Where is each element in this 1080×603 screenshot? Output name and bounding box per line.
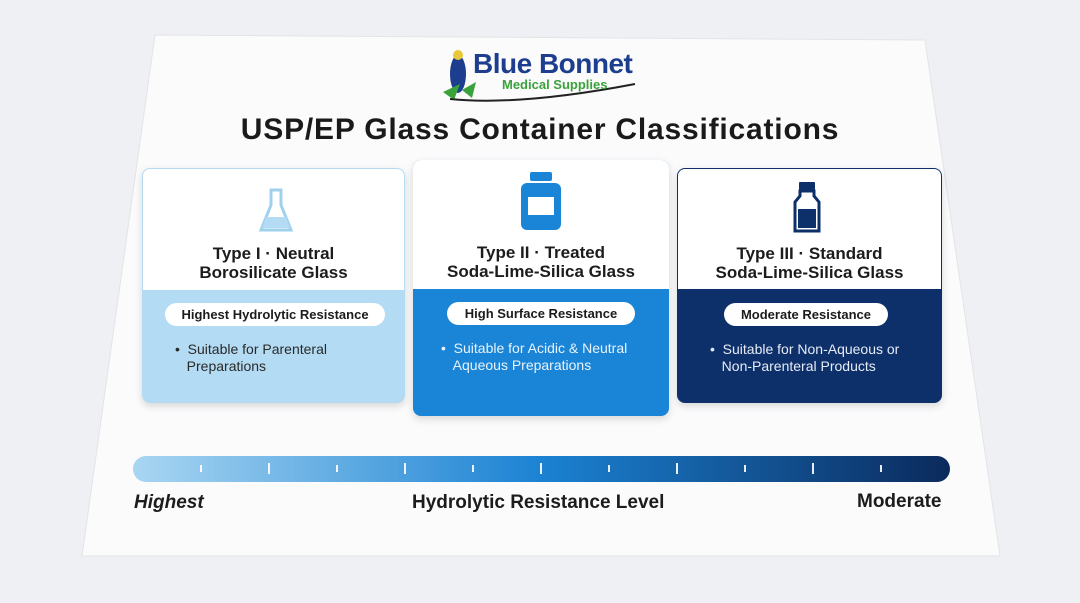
scale label: highest: Highest [134,492,204,513]
icon: vial [794,182,820,232]
panel: Type III [677,168,942,403]
icon: bluebonnet flower [443,50,636,102]
panel: Type III: • Suitable for Non-Aqueous or [710,341,899,357]
logo: Medical Supplies [502,77,607,92]
panel: Type III: Non-Parenteral Products [722,358,876,374]
icon: flask [258,188,294,232]
scale label: axis title: Hydrolytic Resistance Level [412,492,664,513]
logo: Blue Bonnet [473,48,632,79]
panel: Type I: Preparations [187,358,266,374]
panel: Type III: Moderate Resistance [741,307,871,322]
icon: bottle [521,172,561,230]
panel: Type I: • Suitable for Parenteral [175,341,327,357]
title: USP/EP Glass Container Classifications [241,113,839,146]
panel: Type III: Soda-Lime-Silica Glass [715,263,904,282]
panel: Type II: Soda-Lime-Silica Glass [447,262,635,281]
panel: Type II: Aqueous Preparations [453,357,591,373]
panel: Type I: Highest Hydrolytic Resistance [181,307,369,322]
logo [443,48,636,102]
panel: Type II: Type II · Treated [477,243,605,262]
panel: Type I [142,168,405,403]
panel: Type II: • Suitable for Acidic & Neutral [441,340,627,356]
panel: Type III: Type III · Standard [736,244,883,263]
panel: Type II [413,160,669,416]
scale label: moderate: Moderate [857,491,941,512]
panel: Type II: High Surface Resistance [465,306,617,321]
panel: Type I: Borosilicate Glass [199,263,348,282]
panel: Type I: Type I · Neutral [213,244,334,263]
gradient scale bar [133,456,950,482]
